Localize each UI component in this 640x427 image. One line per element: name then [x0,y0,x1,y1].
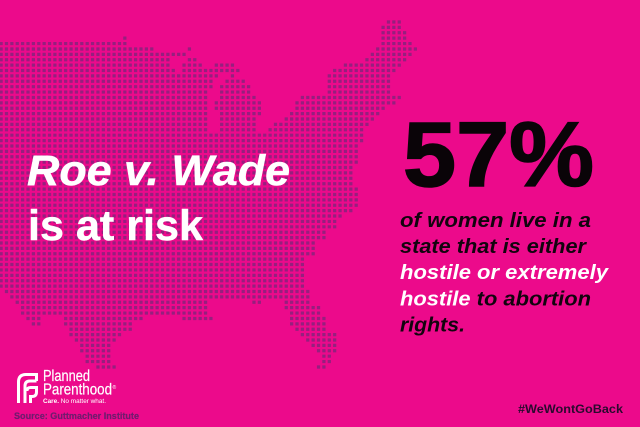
icon: Planned Parenthood mark [18,374,36,403]
statistic description: state that is either [400,235,587,258]
headline: Roe v. Wade is at risk [27,147,290,250]
statistic description [400,209,610,336]
logo wordmark: Planned [43,368,90,385]
headline: Roe v. Wade is at risk: Roe v. Wade [27,147,290,195]
logo wordmark: Parenthood [43,382,112,398]
statistic: 57%: 57% [403,104,594,206]
Planned Parenthood logo [18,368,116,405]
statistic description: hostile to abortion [400,288,591,310]
dotted map of the United States [0,22,417,367]
logo wordmark [43,368,116,405]
logo wordmark: Care. No matter what. [43,398,106,405]
headline: Roe v. Wade is at risk: is at risk [28,202,203,250]
hashtag: #WeWontGoBack [518,402,623,416]
logo wordmark: ® [112,384,116,391]
statistic description: of women live in a [400,209,591,232]
statistic description: hostile or extremely [400,261,610,284]
source credit: Source: Guttmacher Institute [14,411,139,422]
statistic description: rights. [400,314,465,336]
